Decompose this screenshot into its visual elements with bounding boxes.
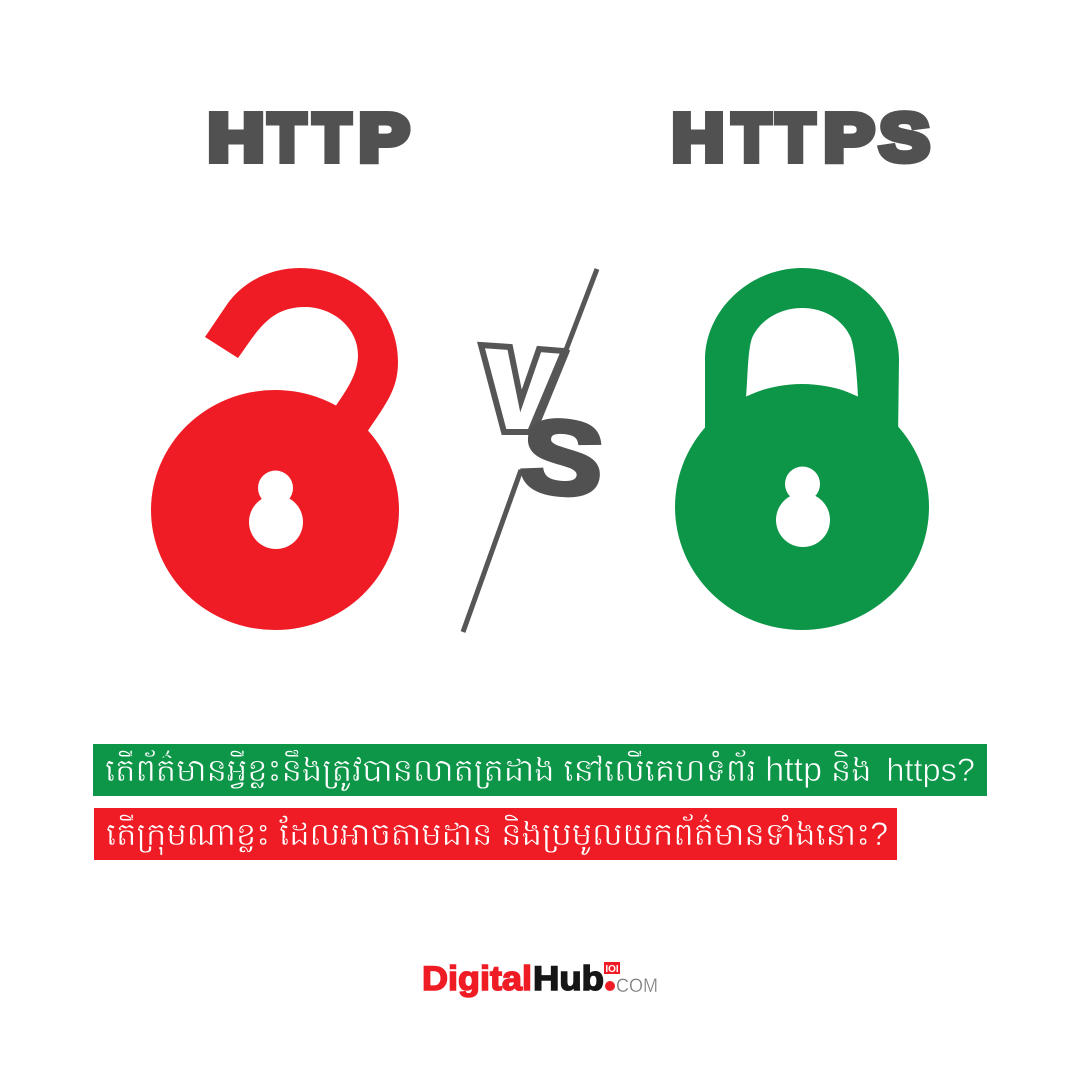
heading: HTTPS: P <box>824 101 874 175</box>
heading: HTTPS <box>672 99 930 176</box>
heading: HTTPS: H <box>672 100 724 175</box>
heading: HTTP: T <box>313 100 351 175</box>
heading: HTTP: T <box>268 100 306 175</box>
versus mark: VS with diagonal line: S <box>516 396 609 520</box>
icon: closed green padlock <box>675 268 929 630</box>
heading: HTTP: H <box>208 101 264 175</box>
icon: open red padlock <box>151 268 399 630</box>
logo: DigitalHub.com: COM <box>616 976 658 997</box>
heading: HTTPS: T <box>732 99 771 175</box>
heading: HTTP: P <box>359 101 409 175</box>
logo: DigitalHub.com: Hub <box>533 960 604 998</box>
heading: HTTP <box>208 100 409 175</box>
callout: red question bar <box>94 808 897 860</box>
heading: HTTPS: S <box>879 101 930 176</box>
versus mark: VS with diagonal line <box>463 269 609 632</box>
logo: DigitalHub.com: Digital <box>422 960 532 998</box>
callout: red question bar: តើក្រុមណាខ្លះ ដែលអាចតាមដាន និងប្រមូលយកព័ត៌មានទាំងនោះ? <box>106 816 888 852</box>
callout: green question bar: តើព័ត៌មានអ្វីខ្លះនឹងត្រូវបានលាតត្រដាង នៅលើគេហទំព័រ http និង https? <box>105 751 975 789</box>
heading: HTTPS: T <box>776 99 815 175</box>
logo: DigitalHub.com: IOI <box>605 964 619 975</box>
